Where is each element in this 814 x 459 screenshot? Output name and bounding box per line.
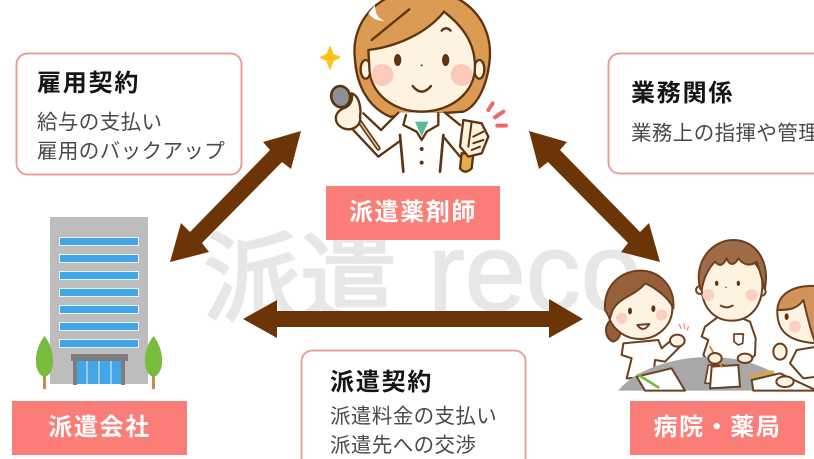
label: hospital: 病院・薬局 [654,414,782,441]
label: hospital [630,401,805,455]
man hands [708,353,722,364]
eyes [394,54,401,66]
watermark: 派遣 [203,225,397,334]
right hand [460,120,488,157]
tie [415,122,428,137]
ears [361,60,371,79]
windows [60,238,138,348]
panel: employment contract: 給与の支払い [37,111,162,134]
pens [638,375,658,387]
marks [488,103,506,126]
cheeks [371,64,393,86]
sparkle [321,47,340,69]
trees [43,370,46,389]
face [368,12,475,112]
nurse left face [608,278,672,339]
arrow: pharmacist to agency [170,131,301,262]
left hand [336,93,360,129]
watermark: reco [428,211,642,334]
panel: work relationship: 業務上の指揮や管理 [631,122,814,145]
panel: work relationship: 業務関係 [631,80,734,107]
icon: office building [36,217,162,389]
right nurse [790,347,814,378]
table [618,357,814,391]
buttons [420,147,424,151]
panel: dispatch contract: 派遣先への交渉 [330,434,476,457]
test tube [460,153,473,172]
panel: employment contract: 雇用契約 [37,70,140,97]
panel: employment contract: 雇用のバックアップ [37,140,225,163]
collar [403,113,438,140]
panel: dispatch contract: 派遣契約 [330,369,433,396]
entrance [75,360,123,384]
panel: work relationship [608,54,814,174]
label: pharmacist [326,186,500,240]
nurse left ponytail [606,320,620,342]
nurse left hair [605,271,673,318]
man head [696,286,704,294]
label: pharmacist: 派遣薬剤師 [349,199,477,226]
label: agency [12,401,187,455]
spoon [329,84,352,109]
man body [702,316,756,363]
arrow: agency to hospital [243,299,583,338]
panel: employment contract [16,54,242,174]
nurse left hand [670,335,685,347]
hair [354,0,490,117]
icon: pharmacist [321,0,506,172]
watermark [203,211,642,334]
man hair [699,240,766,290]
panel: dispatch contract [302,350,526,459]
lab coat [352,113,468,172]
arrow: pharmacist to hospital [529,131,660,262]
panel: dispatch contract: 派遣料金の支払い [330,405,497,428]
mouth and brow [413,28,451,92]
right nurse hand [776,376,794,387]
label: agency: 派遣会社 [48,414,151,441]
icon: hospital staff [605,240,814,391]
nurse left body [622,338,682,378]
papers [637,368,685,391]
fringe line [372,9,409,40]
